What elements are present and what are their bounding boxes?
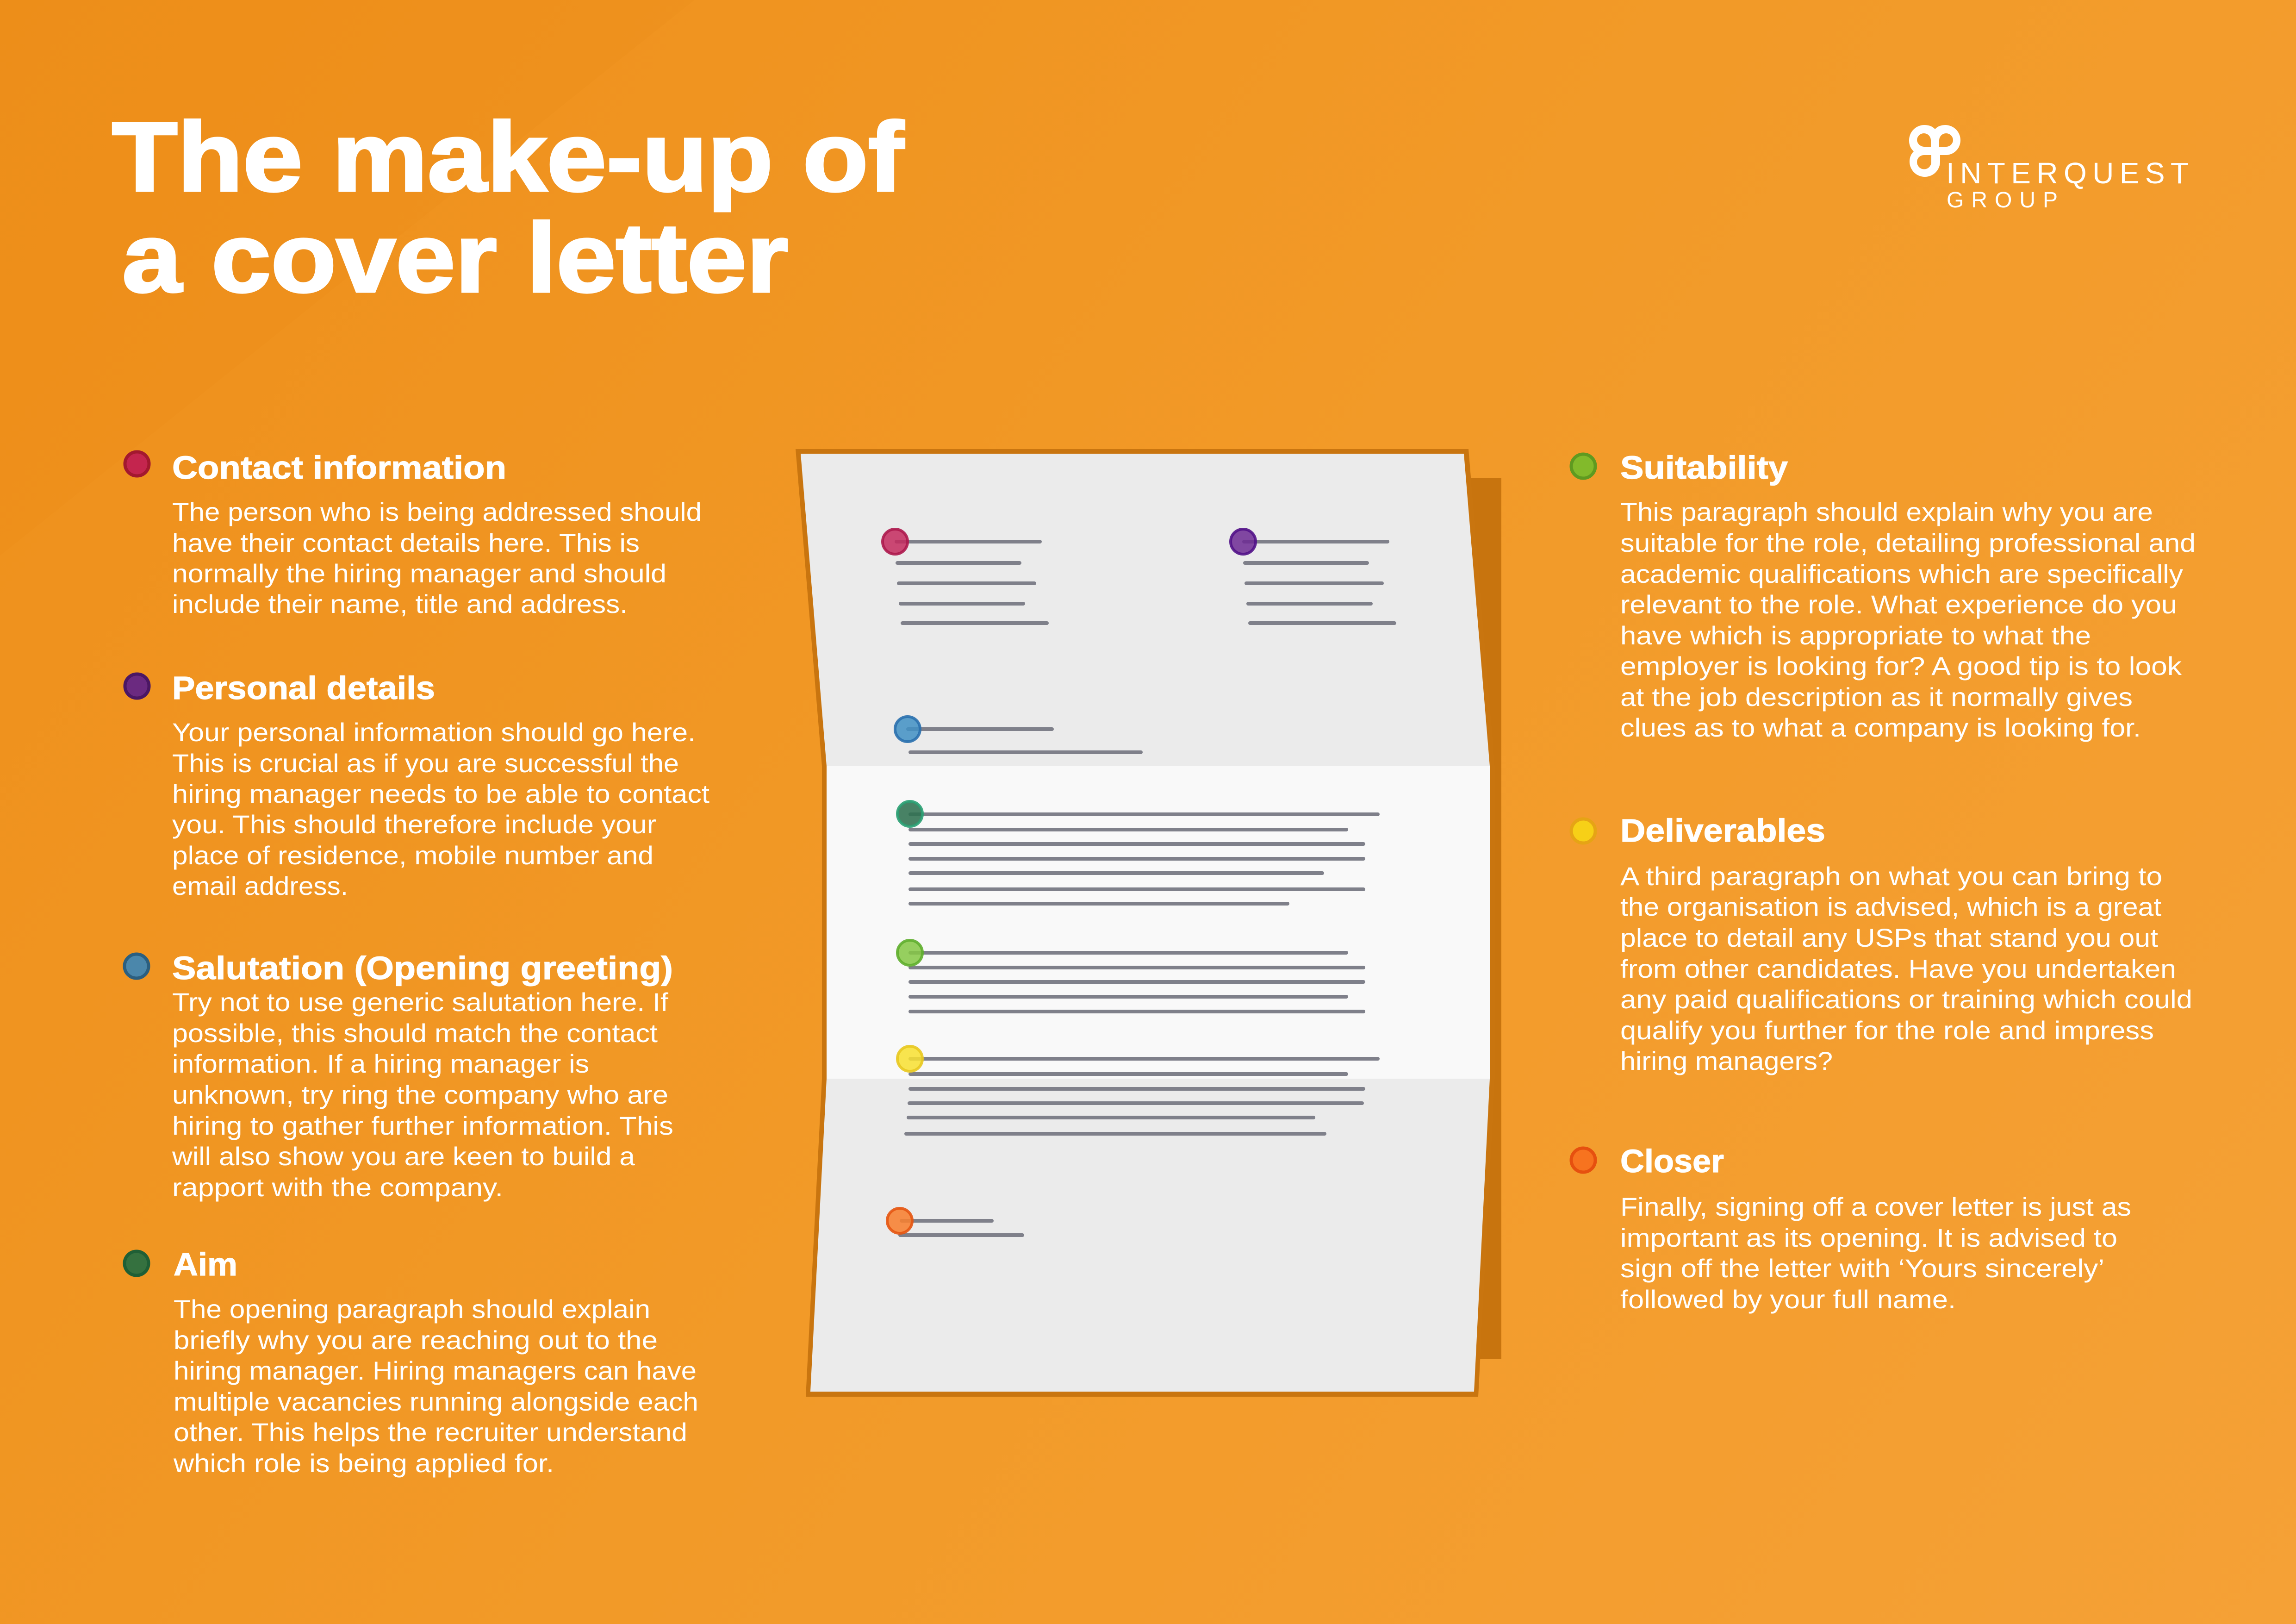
text block: personal details: Your personal information should go here. xyxy=(172,718,696,747)
icon: blue marker xyxy=(124,954,149,978)
text block: suitability: at the job description as it normally gives xyxy=(1620,682,2133,712)
text block: salutation: possible, this should match the contact xyxy=(172,1018,658,1048)
text block: salutation: information. If a hiring manager is xyxy=(172,1049,589,1078)
text block: suitability: employer is looking for? A good tip is to look xyxy=(1620,651,2182,681)
sender address lines xyxy=(1231,529,1394,623)
logo: Interquest Group: INTERQUEST xyxy=(1946,156,2189,190)
text block: personal details: hiring manager needs to be able to contact xyxy=(172,779,709,808)
text block: personal details: place of residence, mobile number and xyxy=(172,841,653,870)
icon: green marker xyxy=(124,1251,149,1275)
panel: closer: Closer xyxy=(1620,1143,1724,1179)
panel: salutation: Salutation (Opening greeting) xyxy=(172,950,673,986)
icon: orange marker xyxy=(1571,1148,1595,1172)
text block: closer: Finally, signing off a cover letter is just as xyxy=(1620,1192,2131,1221)
text block: closer: followed by your full name. xyxy=(1620,1285,1956,1314)
text block: personal details: This is crucial as if you are successful the xyxy=(172,749,679,778)
text block: aim: hiring manager. Hiring managers can have xyxy=(174,1356,697,1385)
text block: contact information: have their contact details here. This is xyxy=(172,528,640,557)
text block: deliverables: the organisation is advised, which is a great xyxy=(1620,892,2161,921)
letter middle fold xyxy=(827,766,1490,1079)
text block: aim: which role is being applied for. xyxy=(173,1449,554,1478)
letter illustration xyxy=(796,449,1501,1397)
letter bottom fold xyxy=(810,1079,1490,1392)
panel: personal details: Personal details xyxy=(172,670,435,706)
text block: deliverables: from other candidates. Have you undertaken xyxy=(1620,954,2176,983)
title xyxy=(112,102,905,312)
icon: lime marker xyxy=(1571,454,1595,478)
text block: salutation: will also show you are keen to build a xyxy=(172,1142,635,1171)
text block: aim: multiple vacancies running alongside each xyxy=(174,1387,698,1416)
text block: deliverables: A third paragraph on what you can bring to xyxy=(1620,862,2162,891)
suitability paragraph lines xyxy=(897,940,1363,1012)
text block: salutation: rapport with the company. xyxy=(172,1173,503,1202)
panel: deliverables xyxy=(1571,812,2192,1075)
text block: salutation xyxy=(172,987,673,1202)
icon: red marker xyxy=(125,452,149,476)
logo: Interquest Group xyxy=(1909,125,2189,212)
panel: salutation xyxy=(124,950,673,1202)
panel: aim xyxy=(124,1246,698,1478)
text block: deliverables: place to detail any USPs that stand you out xyxy=(1620,923,2158,952)
letter top fold xyxy=(801,454,1490,766)
text block: aim: The opening paragraph should explain xyxy=(174,1294,650,1324)
text block: contact information xyxy=(172,497,702,618)
closer lines xyxy=(887,1208,1022,1235)
icon: yellow marker xyxy=(1571,819,1595,843)
text block: suitability xyxy=(1620,497,2196,742)
text block: deliverables: qualify you further for the role and impress xyxy=(1620,1016,2154,1045)
deliverables paragraph lines xyxy=(897,1046,1378,1134)
text block: contact information: include their name, title and address. xyxy=(172,589,628,618)
panel: contact information: Contact information xyxy=(172,450,506,486)
aim paragraph lines xyxy=(897,801,1378,904)
text block: suitability: suitable for the role, detailing professional and xyxy=(1620,528,2196,557)
text block: suitability: relevant to the role. What experience do you xyxy=(1620,590,2177,619)
panel: closer xyxy=(1571,1143,2131,1314)
panel: aim: Aim xyxy=(174,1246,237,1282)
text block: suitability: have which is appropriate to what the xyxy=(1620,621,2091,650)
icon: purple marker xyxy=(125,674,149,698)
text block: deliverables: any paid qualifications or training which could xyxy=(1620,985,2192,1014)
text block: deliverables: hiring managers? xyxy=(1620,1046,1833,1075)
text block: closer: important as its opening. It is advised to xyxy=(1620,1223,2117,1252)
text block: contact information: normally the hiring manager and should xyxy=(172,559,666,588)
text block: aim: briefly why you are reaching out to the xyxy=(174,1325,658,1355)
panel: suitability xyxy=(1571,450,2196,742)
text block: closer: sign off the letter with ‘Yours sincerely’ xyxy=(1620,1254,2104,1283)
text block: aim: other. This helps the recruiter understand xyxy=(174,1418,687,1447)
text block: suitability: academic qualifications which are specifically xyxy=(1620,559,2183,588)
title: a cover letter xyxy=(122,203,788,312)
panel: personal details xyxy=(125,670,709,900)
recipient address lines xyxy=(883,529,1047,623)
text block: deliverables xyxy=(1620,862,2192,1075)
letter shadow xyxy=(1458,478,1501,1359)
text block: suitability: This paragraph should explain why you are xyxy=(1620,497,2153,526)
panel: suitability: Suitability xyxy=(1620,450,1788,486)
text block: closer xyxy=(1620,1192,2131,1314)
title: The make-up of xyxy=(112,102,905,212)
text block: aim xyxy=(173,1294,698,1478)
text block: suitability: clues as to what a company is looking for. xyxy=(1620,713,2141,742)
panel: contact information xyxy=(125,450,702,618)
text block: salutation: unknown, try ring the company who are xyxy=(172,1080,668,1109)
icon: logo mark xyxy=(1909,125,1960,177)
panel: deliverables: Deliverables xyxy=(1620,812,1825,849)
logo: Interquest Group: GROUP xyxy=(1947,188,2058,212)
text block: personal details xyxy=(172,718,709,900)
text block: personal details: email address. xyxy=(172,871,348,900)
text block: contact information: The person who is being addressed should xyxy=(172,497,702,526)
text block: personal details: you. This should therefore include your xyxy=(172,810,656,839)
text block: salutation: hiring to gather further information. This xyxy=(172,1111,673,1140)
salutation lines xyxy=(895,717,1141,752)
letter border xyxy=(796,449,1495,1397)
text block: salutation: Try not to use generic salutation here. If xyxy=(172,987,668,1017)
